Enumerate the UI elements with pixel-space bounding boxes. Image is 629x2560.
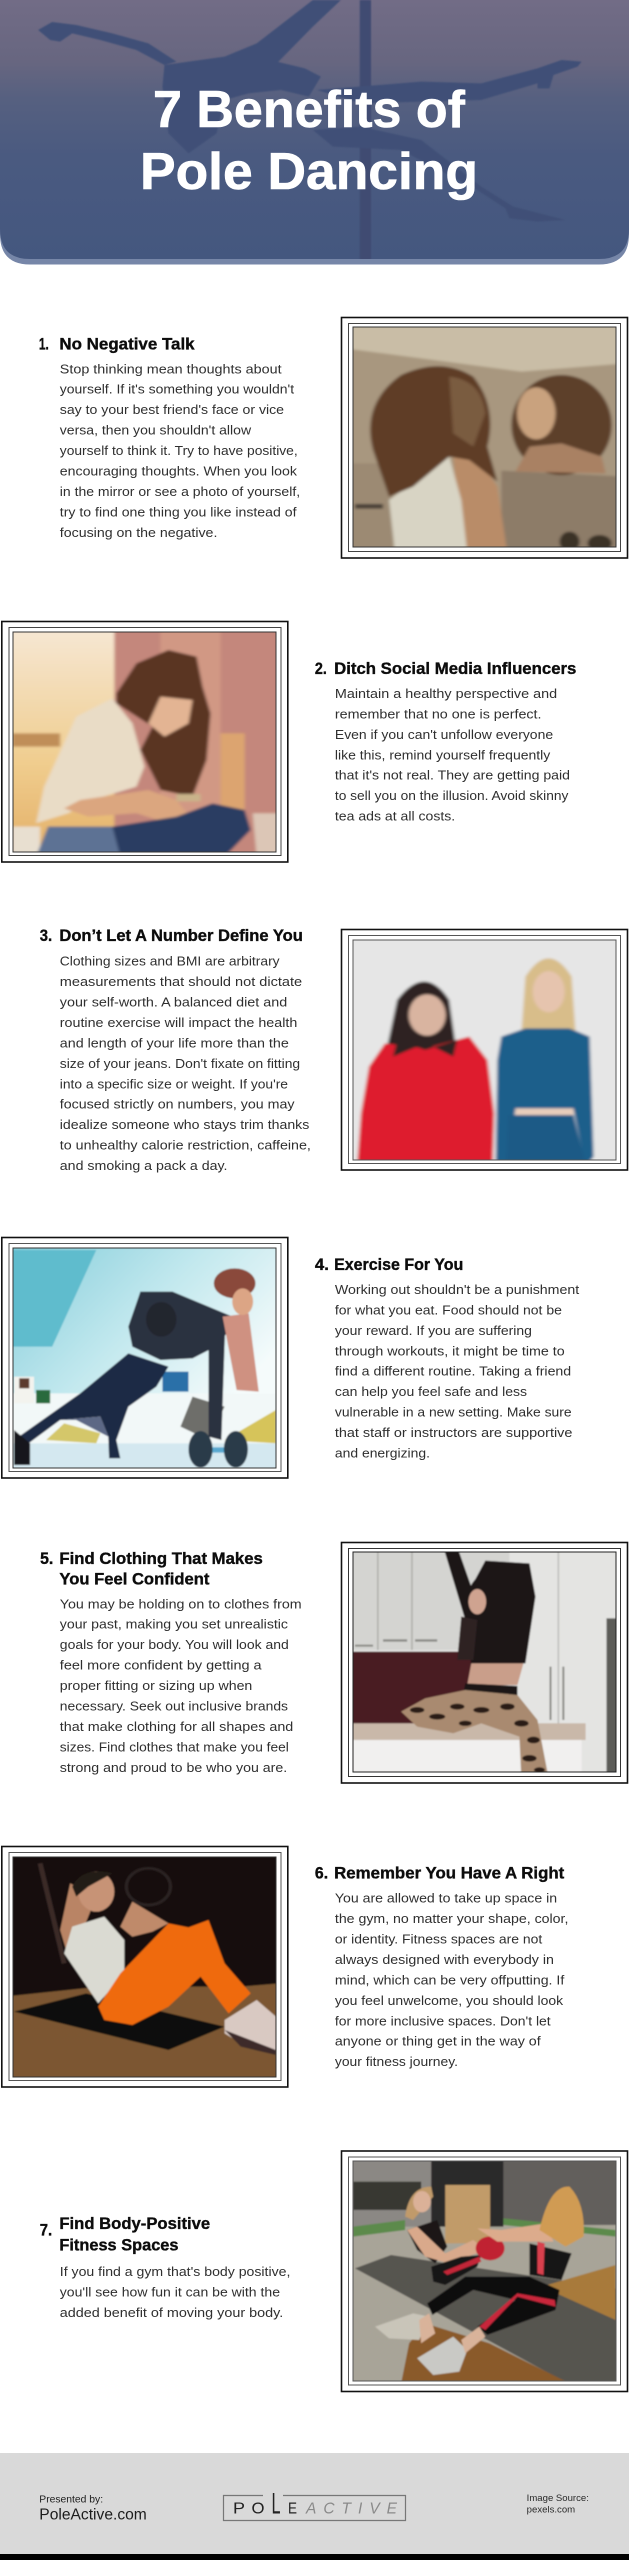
panel: benefit 7 text <box>40 2215 290 2320</box>
presented by credit: Presented by: <box>39 2493 103 2505</box>
body text: you'll see how fun it can be with the <box>60 2284 280 2299</box>
body text: routine exercise will impact the health <box>60 1015 297 1030</box>
panel: benefit 6 text <box>315 1865 568 2069</box>
body text: yourself. If it's something you wouldn't <box>60 382 295 397</box>
body text: or identity. Fitness spaces are not <box>335 1932 543 1947</box>
panel: benefit 4 text <box>315 1256 580 1460</box>
heading: ditch social media influencers: Ditch Social Media Influencers <box>334 660 576 678</box>
heading: don't let a number define you: 3. <box>40 927 52 945</box>
header banner <box>0 0 629 264</box>
heading: find clothing that makes you feel confident: Find Clothing That Makes <box>59 1550 263 1568</box>
body text: measurements that should not dictate <box>60 974 302 989</box>
body text <box>60 1596 302 1775</box>
heading: find body-positive fitness spaces: Fitness Spaces <box>59 2236 178 2254</box>
body text: find a different routine. Taking a friend <box>335 1364 571 1379</box>
photo: two women in red and blue <box>342 930 628 1170</box>
body text: in the mirror or see a photo of yourself, <box>60 484 300 499</box>
body text: If you find a gym that's body positive, <box>60 2264 290 2279</box>
heading: exercise for you: 4. <box>315 1256 329 1274</box>
heading: find clothing that makes you feel confident: 5. <box>40 1550 53 1568</box>
body text: focused strictly on numbers, you may <box>60 1097 295 1112</box>
body text: say to your best friend's face or vice <box>60 402 284 417</box>
heading: remember you have a right: Remember You Have A Right <box>334 1865 565 1883</box>
panel: benefit 2 text <box>315 660 576 824</box>
body text: You may be holding on to clothes from <box>60 1596 302 1611</box>
body text <box>335 1282 580 1460</box>
body text: tea ads at all costs. <box>335 809 455 824</box>
body text: versa, then you shouldn't allow <box>60 423 252 438</box>
heading: find clothing that makes you feel confident <box>40 1550 263 1588</box>
body text: focusing on the negative. <box>60 525 217 540</box>
title: Pole Dancing <box>140 143 478 201</box>
body text <box>60 2264 290 2320</box>
body text: necessary. Seek out inclusive brands <box>60 1698 289 1714</box>
body text: strong and proud to be who you are. <box>60 1760 287 1775</box>
heading: find body-positive fitness spaces: 7. <box>40 2222 52 2240</box>
body text: to sell you on the illusion. Avoid skinny <box>335 788 569 803</box>
body text <box>60 361 300 540</box>
body text: size of your jeans. Don't fixate on fitting <box>60 1056 300 1071</box>
body text: Clothing sizes and BMI are arbitrary <box>60 954 280 969</box>
image source credit: Image Source: <box>527 2493 589 2504</box>
body text: can help you feel safe and less <box>335 1384 528 1399</box>
title: 7 Benefits of <box>153 81 466 139</box>
body text: vulnerable in a new setting. Make sure <box>335 1405 572 1420</box>
logo: pole active: E <box>288 2500 297 2517</box>
body text: and length of your life more than the <box>60 1035 289 1050</box>
image source credit: pexels.com <box>527 2505 575 2516</box>
body text: Working out shouldn't be a punishment <box>335 1282 580 1297</box>
body text: your past, making you set unrealistic <box>60 1617 289 1632</box>
photo: woman doing sit-ups <box>2 1846 288 2087</box>
footer band <box>0 2453 629 2560</box>
heading: find body-positive fitness spaces <box>40 2215 210 2254</box>
body text: goals for your body. You will look and <box>60 1637 289 1652</box>
body text: through workouts, it might be time to <box>335 1343 565 1358</box>
photo: woman in leopard leggings <box>342 1542 628 1783</box>
body text: and energizing. <box>335 1446 430 1460</box>
logo: pole active: L <box>272 2487 280 2520</box>
body text: your reward. If you are suffering <box>335 1323 532 1338</box>
logo: pole active: P <box>233 2500 245 2517</box>
photo: two women with medicine ball <box>342 2151 628 2392</box>
body text: Even if you can't unfollow everyone <box>335 727 553 742</box>
body text: sizes. Find clothes that make you feel <box>60 1739 289 1754</box>
banner photo: pole dancer silhouette <box>0 0 629 260</box>
body text: mind, which can be very offputting. If <box>335 1972 565 1987</box>
panel: benefit 1 text <box>39 335 300 540</box>
body text: like this, remind yourself frequently <box>335 747 551 762</box>
heading: ditch social media influencers: 2. <box>315 660 327 678</box>
body text: yourself to think it. Try to have positive, <box>60 443 298 458</box>
body text <box>60 954 311 1173</box>
body text: your self-worth. A balanced diet and <box>60 995 287 1010</box>
body text: feel more confident by getting a <box>60 1658 262 1673</box>
body text: your fitness journey. <box>335 2054 458 2069</box>
body text: Maintain a healthy perspective and <box>335 686 557 701</box>
heading: exercise for you: Exercise For You <box>334 1256 463 1274</box>
heading: don't let a number define you: Don’t Let A Number Define You <box>59 927 303 945</box>
panel: benefit 3 text <box>40 927 311 1173</box>
heading: remember you have a right: 6. <box>315 1865 328 1883</box>
logo: pole active <box>224 2487 406 2520</box>
body text: idealize someone who stays trim thanks <box>60 1117 310 1132</box>
body text: anyone or thing get in the way of <box>335 2034 541 2049</box>
presented by credit <box>39 2493 147 2523</box>
heading: no negative talk: 1. <box>39 335 49 353</box>
photo: woman on phone <box>2 622 288 862</box>
body text: remember that no one is perfect. <box>335 706 542 721</box>
body text: always designed with everybody in <box>335 1952 554 1967</box>
logo: pole active: O <box>252 2500 264 2517</box>
image source credit <box>527 2493 589 2516</box>
body text: that make clothing for all shapes and <box>60 1719 293 1734</box>
body text: you feel unwelcome, you should look <box>335 1993 564 2008</box>
body text: for more inclusive spaces. Don't let <box>335 2013 551 2028</box>
presented by credit: PoleActive.com <box>39 2506 147 2523</box>
body text: that it's not real. They are getting paid <box>335 768 570 783</box>
body text: Stop thinking mean thoughts about <box>60 361 282 376</box>
photo: woman lifting dumbbell <box>2 1238 288 1478</box>
body text: try to find one thing you like instead of <box>60 504 297 519</box>
heading: find clothing that makes you feel confident: You Feel Confident <box>59 1570 210 1588</box>
body text: into a specific size or weight. If you're <box>60 1076 288 1091</box>
body text <box>335 686 570 824</box>
photo: woman at mirror <box>342 318 628 558</box>
body text: and smoking a pack a day. <box>60 1158 227 1173</box>
title <box>140 81 478 201</box>
body text: that staff or instructors are supportive <box>335 1425 572 1440</box>
body text: for what you eat. Food should not be <box>335 1302 562 1317</box>
body text: to unhealthy calorie restriction, caffeine, <box>60 1138 311 1153</box>
heading: find body-positive fitness spaces: Find Body-Positive <box>59 2215 210 2233</box>
body text: You are allowed to take up space in <box>335 1891 557 1906</box>
body text <box>335 1891 568 2069</box>
body text: added benefit of moving your body. <box>60 2305 283 2320</box>
logo: pole active: ACTIVE <box>305 2500 398 2517</box>
heading: no negative talk: No Negative Talk <box>59 335 195 353</box>
body text: the gym, no matter your shape, color, <box>335 1911 568 1926</box>
panel: benefit 5 text <box>40 1550 302 1775</box>
body text: proper fitting or sizing up when <box>60 1678 252 1693</box>
body text: encouraging thoughts. When you look <box>60 464 297 478</box>
